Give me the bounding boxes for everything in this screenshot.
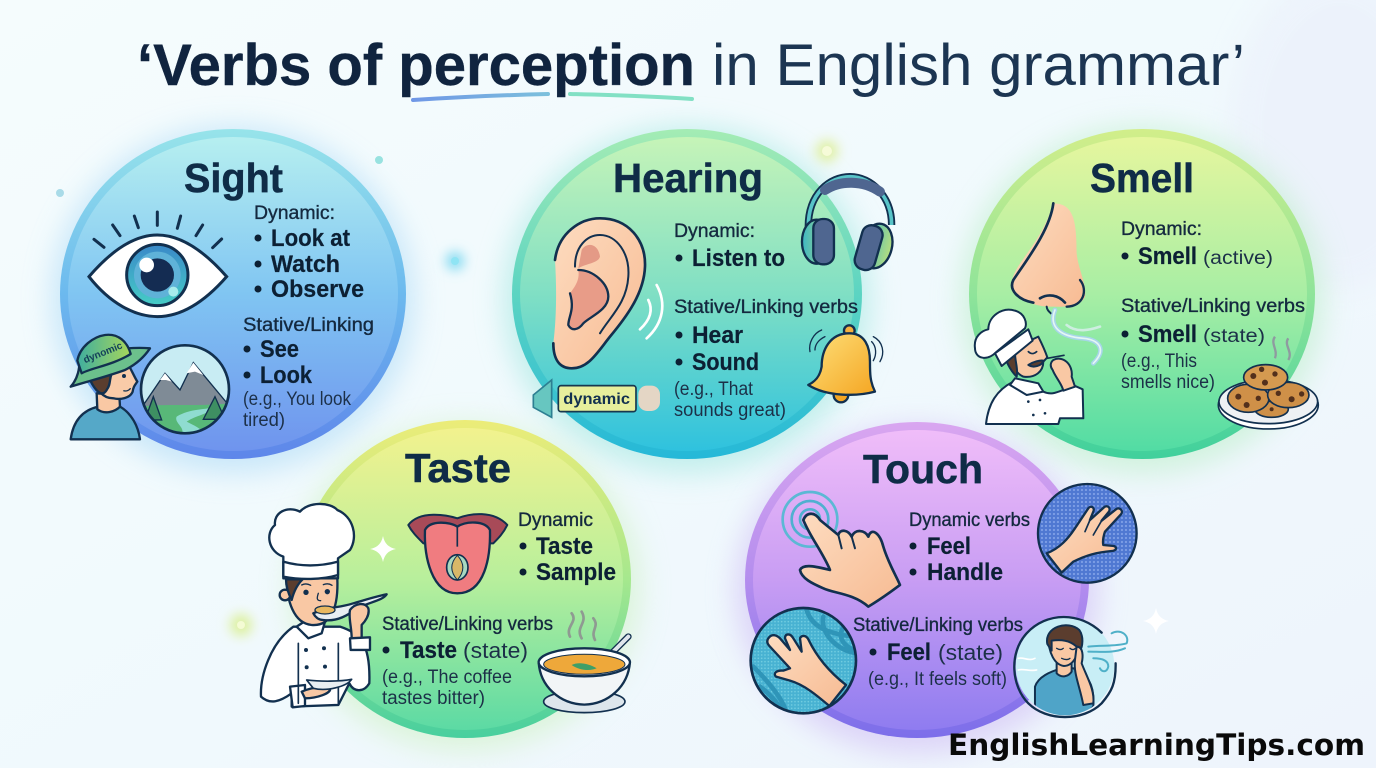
text: taste dynamic <box>518 510 616 586</box>
icon: tongue <box>408 514 507 593</box>
text: hearing dynamic: Listen to <box>692 245 785 272</box>
text: taste dynamic: Dynamic <box>518 510 593 531</box>
text: touch dynamic: Dynamic verbs <box>909 510 1030 531</box>
text: taste dynamic: Sample <box>536 559 616 586</box>
text: touch stative: (e.g., It feels soft) <box>868 669 1007 690</box>
text: smell dynamic: (active) <box>1203 248 1273 269</box>
icon: ear <box>553 218 662 368</box>
icon: plate of cookies <box>1218 337 1318 429</box>
text: taste stative: Taste <box>400 637 457 664</box>
heading: taste: Taste <box>405 445 511 491</box>
text: sight stative: tired) <box>243 410 285 431</box>
icon: eye <box>89 212 227 317</box>
text: sight dynamic <box>254 203 364 303</box>
text: hearing stative: Stative/Linking verbs <box>674 297 858 318</box>
heading: hearing: Hearing <box>613 155 763 201</box>
text: taste stative: Stative/Linking verbs <box>382 614 553 635</box>
text: smell dynamic: Dynamic: <box>1121 219 1202 240</box>
icon: dynamic speaker tag: dynamic <box>563 391 630 408</box>
text: touch stative: Feel <box>887 639 931 666</box>
text: sight stative: Stative/Linking <box>243 315 374 336</box>
text: hearing stative: sounds great) <box>674 400 786 421</box>
icon: dynamic speaker tag <box>533 380 660 417</box>
text: smell stative: (state) <box>1203 326 1265 347</box>
text: sight dynamic: Dynamic: <box>254 203 335 224</box>
text: smell dynamic: Smell <box>1138 243 1197 270</box>
footer website credit: EnglishLearningTips.com <box>948 728 1365 762</box>
text: smell stative: (e.g., This <box>1121 351 1197 372</box>
decorative glows and sparkles <box>56 140 1169 636</box>
text: taste stative: tastes bitter) <box>382 688 485 709</box>
text: hearing dynamic: Dynamic: <box>674 221 755 242</box>
text: touch stative: (state) <box>938 640 1003 665</box>
text: hearing stative: (e.g., That <box>674 379 754 400</box>
panel: sight <box>60 129 406 459</box>
text: touch dynamic <box>909 510 1030 586</box>
panel: smell <box>969 129 1318 459</box>
text: hearing stative: Hear <box>692 322 743 349</box>
icon: sparkle <box>370 536 396 562</box>
text: hearing dynamic <box>674 221 785 272</box>
text: smell stative <box>1121 296 1305 393</box>
text: touch dynamic: Handle <box>927 559 1003 586</box>
text: touch stative <box>853 615 1023 690</box>
icon: headphones <box>802 177 897 272</box>
panel: hearing <box>512 129 897 459</box>
icon: chef smelling <box>975 310 1083 424</box>
heading: sight: Sight <box>184 155 283 201</box>
text: smell stative: Smell <box>1138 321 1197 348</box>
text: smell stative: smells nice) <box>1121 372 1215 393</box>
text: sight dynamic: Watch <box>271 251 340 278</box>
title <box>137 33 1245 98</box>
icon: hiker with dynomic hat: dynomic <box>82 340 125 366</box>
icon: chef tasting <box>261 504 387 707</box>
text: hearing stative: Sound <box>692 349 759 376</box>
text: sight stative <box>243 315 374 431</box>
heading: touch: Touch <box>863 446 983 492</box>
text: taste dynamic: Taste <box>536 533 593 560</box>
icon: nose <box>1012 203 1100 363</box>
text: smell dynamic <box>1121 219 1273 270</box>
text: sight dynamic: Look at <box>271 225 350 252</box>
icon: soup bowl <box>539 612 630 713</box>
icon: bell <box>808 325 883 402</box>
text: taste stative: (e.g., The coffee <box>382 667 512 688</box>
text: touch dynamic: Feel <box>927 533 971 560</box>
panel: taste <box>261 420 631 738</box>
title: in English grammar’ <box>712 33 1245 98</box>
panel: touch <box>745 422 1137 738</box>
text: sight stative: Look <box>260 362 313 389</box>
icon: hiker with dynomic hat <box>71 335 150 439</box>
icon: hand on dotted surface <box>1038 484 1137 583</box>
text: smell stative: Stative/Linking verbs <box>1121 296 1305 317</box>
title: ‘Verbs of perception <box>137 33 695 98</box>
text: sight stative: (e.g., You look <box>243 389 351 410</box>
title underline <box>413 94 692 100</box>
text: hearing stative <box>674 297 858 421</box>
text: taste stative <box>382 614 553 709</box>
heading: smell: Smell <box>1090 155 1194 201</box>
icon: hand on soft fabric <box>751 608 857 713</box>
text: touch stative: Stative/Linking verbs <box>853 615 1023 636</box>
text: sight dynamic: Observe <box>271 276 364 303</box>
text: sight stative: See <box>260 336 299 363</box>
text: taste stative: (state) <box>463 638 528 663</box>
icon: pointing hand <box>783 492 900 607</box>
icon: mountain landscape <box>140 345 230 437</box>
icon: person feeling wind <box>1014 617 1127 717</box>
